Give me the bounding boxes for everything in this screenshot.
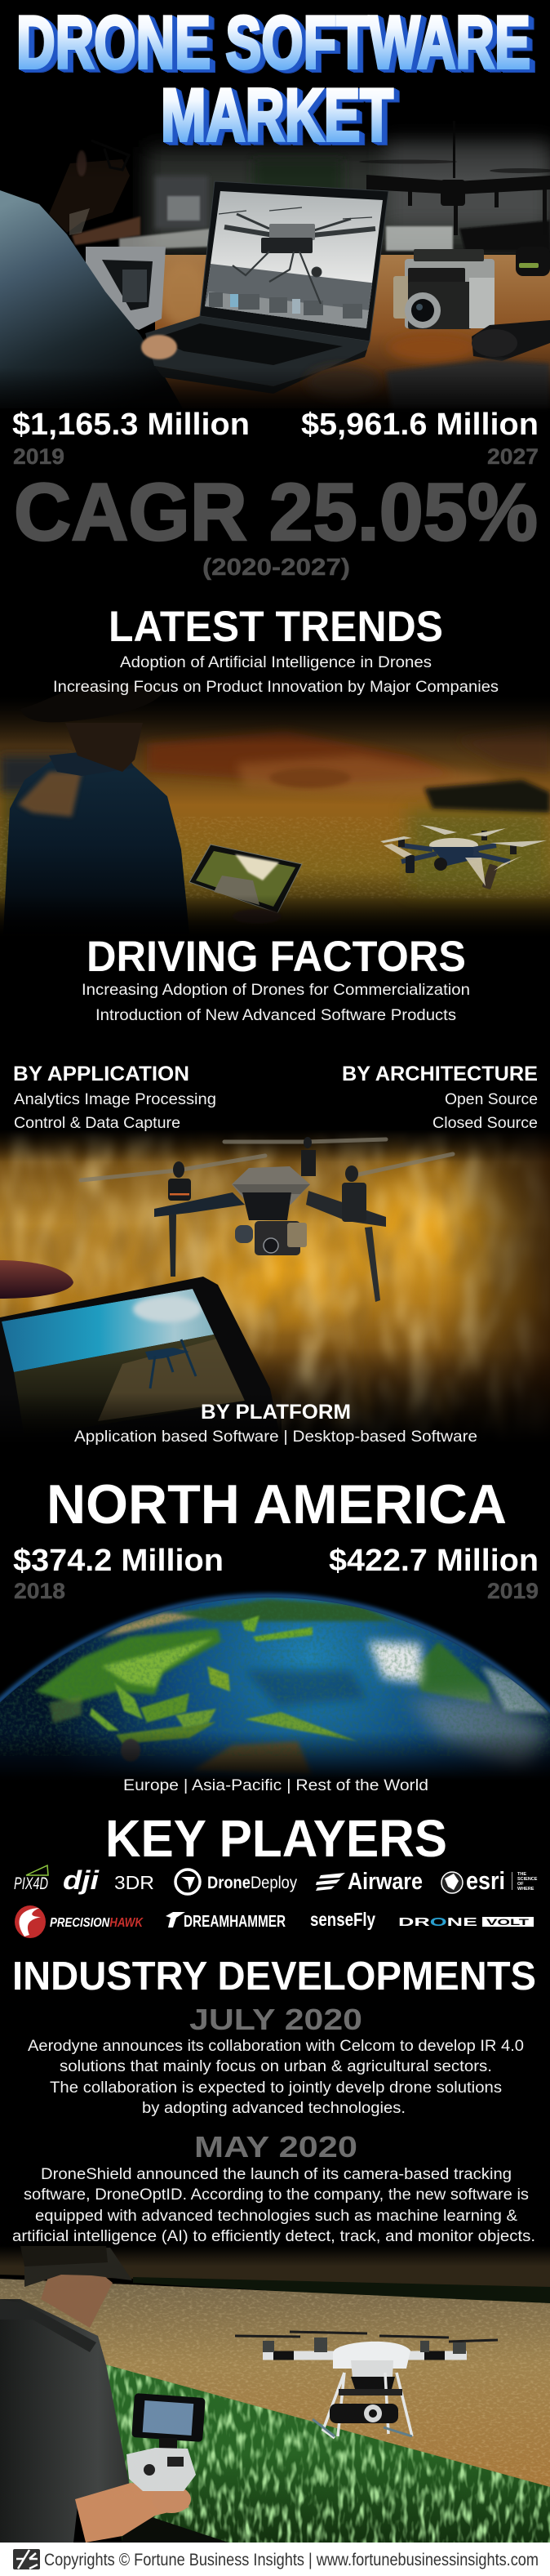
photo: farmer with tablet and drone in field — [0, 684, 550, 939]
logo: Airware — [316, 1869, 423, 1895]
stat: 2027 market size: 2027 — [487, 444, 539, 469]
stat: north america 2019: $422.7 Million — [329, 1544, 539, 1578]
stat: north america 2018: $374.2 Million — [13, 1544, 224, 1578]
logo: Esri: esri — [466, 1866, 505, 1895]
stat: north america 2018 — [13, 1544, 224, 1603]
segment: by architecture: Closed Source — [432, 1115, 538, 1132]
development: July 2020: solutions that mainly focus on urban & agricultural sectors. — [60, 2058, 492, 2075]
heading: latest trends — [53, 603, 499, 696]
logo: Pix4D: PIX4D — [14, 1874, 48, 1893]
logo: Esri — [441, 1866, 538, 1895]
title: MARKET — [161, 74, 393, 157]
stat: 2027 market size — [301, 408, 539, 469]
logo: DroneDeploy: DroneDeploy — [207, 1874, 297, 1892]
logo: Esri: SCIENCE — [517, 1877, 538, 1882]
logo: DreamHammer: DREAMHAMMER — [184, 1913, 286, 1931]
segment: by platform: BY PLATFORM — [201, 1401, 351, 1424]
stat: north america 2019 — [329, 1544, 539, 1603]
segment: by application: Analytics Image Processing — [14, 1091, 216, 1108]
drone — [81, 1137, 453, 1302]
segment: by application: Control & Data Capture — [14, 1115, 180, 1132]
development: May 2020: MAY 2020 — [194, 2130, 357, 2164]
segment: by architecture — [342, 1063, 538, 1132]
laptop drone on screen — [219, 207, 375, 304]
heading: north america: NORTH AMERICA — [47, 1473, 507, 1535]
logo: 3DR: 3DR — [114, 1872, 154, 1893]
CAGR: (2020-2027) — [202, 555, 350, 581]
logo: DJI: dji — [63, 1865, 100, 1895]
top-right drone silhouette — [359, 121, 550, 235]
regions list: Europe | Asia-Pacific | Rest of the World — [123, 1777, 428, 1794]
logo: DroneDeploy — [175, 1870, 297, 1894]
tablet — [189, 845, 302, 913]
stat: 2019 market size — [12, 408, 250, 469]
logo: Drone Volt — [398, 1915, 534, 1929]
hand — [141, 335, 177, 359]
heading: industry developments: INDUSTRY DEVELOPMENTS — [12, 1954, 536, 1999]
heading: key players: KEY PLAYERS — [105, 1809, 447, 1868]
logo: Drone Volt: DR O NE — [398, 1915, 477, 1929]
CAGR: CAGR 25.05% — [14, 466, 538, 557]
footer — [0, 2543, 550, 2576]
heading: driving factors: DRIVING FACTORS — [86, 933, 466, 981]
development: May 2020: DroneShield announced the launch of its camera-based tracking — [41, 2166, 512, 2183]
development: July 2020: The collaboration is expected to jointly develp drone solutions — [50, 2079, 502, 2097]
logo: PrecisionHawk: PRECISIONHAWK — [50, 1916, 144, 1930]
stat: north america 2019: 2019 — [487, 1579, 539, 1603]
stat: 2027 market size: $5,961.6 Million — [301, 408, 539, 442]
heading: latest trends: Increasing Focus on Product Innovation by Major Companies — [53, 679, 499, 696]
heading: driving factors — [82, 933, 470, 1024]
globe — [0, 1590, 550, 1777]
finger — [0, 1260, 73, 1299]
photo: drone over wheat field — [0, 1130, 550, 1444]
operator — [0, 2246, 191, 2543]
heading: driving factors: Increasing Adoption of Drones for Commercialization — [82, 982, 470, 999]
camera — [393, 249, 495, 329]
logo: Airware: Airware — [348, 1869, 423, 1895]
logo: Esri: WHERE — [517, 1887, 534, 1892]
segment: by platform: Application based Software | Desktop-based Software — [74, 1428, 477, 1446]
stat: 2019 market size: 2019 — [13, 444, 64, 469]
logo: Esri: THE — [517, 1872, 526, 1877]
development: July 2020: by adopting advanced technologies. — [142, 2100, 406, 2117]
logo: Pix4D — [14, 1865, 48, 1893]
tablet — [0, 1277, 277, 1423]
logo: Drone Volt: VOLT — [486, 1918, 530, 1928]
hero photo: person at laptop with drone — [0, 132, 550, 407]
company logos — [14, 1865, 538, 1938]
logo: Esri: OF — [517, 1882, 524, 1887]
person head — [49, 140, 130, 235]
person shirt — [0, 190, 183, 408]
stat: 2019 market size: $1,165.3 Million — [12, 408, 250, 442]
development: May 2020: software, DroneOptID. According to the company, the new software is — [24, 2186, 529, 2204]
heading: latest trends: Adoption of Artificial Intelligence in Drones — [120, 654, 432, 671]
desk surface — [155, 255, 550, 408]
stat: north america 2018: 2018 — [14, 1579, 65, 1603]
development: May 2020: equipped with advanced technologies such as machine learning & — [35, 2208, 517, 2225]
small laptop — [86, 247, 166, 330]
logo: senseFly: senseFly — [310, 1909, 375, 1930]
segment: by architecture: Open Source — [445, 1091, 538, 1108]
heading: driving factors: Introduction of New Advanced Software Products — [95, 1007, 456, 1024]
segment: by application — [13, 1063, 216, 1132]
drone — [380, 825, 547, 889]
development: July 2020: JULY 2020 — [189, 2003, 362, 2036]
development: July 2020: Aerodyne announces its collaboration with Celcom to develop IR 4.0 — [28, 2038, 524, 2055]
segment: by application: BY APPLICATION — [13, 1063, 189, 1085]
drone — [235, 2332, 498, 2438]
segment: by architecture: BY ARCHITECTURE — [342, 1063, 538, 1085]
farmer — [3, 755, 189, 934]
title — [16, 2, 530, 157]
logo: PrecisionHawk — [15, 1905, 144, 1938]
hand controller — [126, 2393, 206, 2491]
main laptop — [145, 181, 388, 394]
segment: by platform — [74, 1401, 477, 1446]
development: May 2020 — [24, 2130, 529, 2225]
photo: operator flying drone over crops — [0, 2246, 550, 2543]
body text last line over photo: artificial intelligence (AI) to efficiently detect, track, and monitor objects. — [12, 2228, 535, 2245]
logo: Fortune Business Insights — [13, 2549, 40, 2569]
logo: DreamHammer — [166, 1912, 286, 1931]
heading: latest trends: LATEST TRENDS — [109, 603, 443, 651]
development: July 2020 — [28, 2003, 524, 2117]
remote — [472, 320, 550, 361]
